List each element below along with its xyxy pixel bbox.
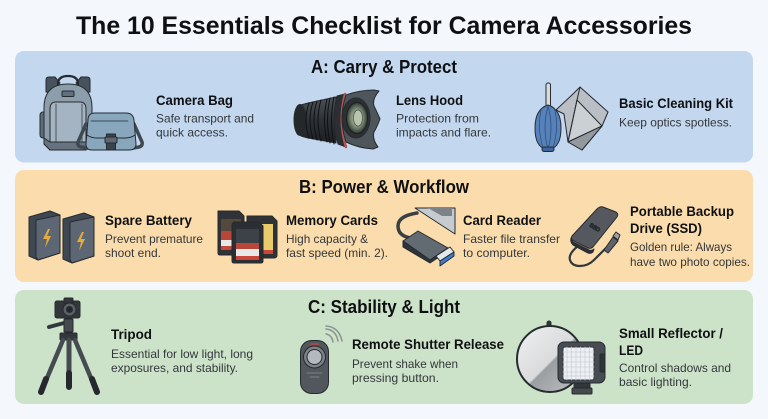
text: remote shutter release: Remote Shutter Release xyxy=(352,337,504,352)
icon: reflector and LED xyxy=(517,321,605,394)
panel: carry and protect xyxy=(15,51,753,162)
text: camera bag: Camera Bag xyxy=(156,93,233,108)
text: memory cards: Memory Cards xyxy=(286,213,378,228)
text: memory cards: fast speed (min. 2). xyxy=(286,246,388,260)
text: small reflector / LED: Control shadows and xyxy=(619,361,731,375)
icon: portable SSD xyxy=(570,207,620,266)
text: tripod xyxy=(111,327,253,375)
text: small reflector / LED xyxy=(619,326,731,389)
text: portable backup drive: have two photo copies. xyxy=(630,255,750,269)
text: spare battery: shoot end. xyxy=(105,246,161,260)
text: portable backup drive: Drive (SSD) xyxy=(630,221,702,236)
text: tripod: Tripod xyxy=(111,327,152,342)
icon: portable SSD: SSD xyxy=(588,223,601,234)
text: memory cards xyxy=(286,213,388,260)
text: cleaning kit: Basic Cleaning Kit xyxy=(619,96,733,111)
text: portable backup drive xyxy=(630,204,750,269)
text: card reader xyxy=(463,213,560,260)
text: card reader: to computer. xyxy=(463,246,530,260)
icon: card reader xyxy=(398,208,455,266)
icon: spare batteries xyxy=(29,211,94,263)
text: camera bag xyxy=(156,93,254,140)
text: spare battery: Spare Battery xyxy=(105,213,192,228)
icon: memory cards xyxy=(218,211,277,263)
text: small reflector / LED: basic lighting. xyxy=(619,375,692,389)
text: cleaning kit xyxy=(619,96,733,130)
icon: tripod with camera xyxy=(41,298,97,392)
panel: power and workflow xyxy=(15,170,753,282)
icon: lens hood xyxy=(294,90,380,149)
text: portable backup drive: Golden rule: Always xyxy=(630,240,732,254)
text: cleaning kit: Keep optics spotless. xyxy=(619,116,732,130)
icon: remote shutter xyxy=(300,326,342,394)
text: small reflector / LED: Small Reflector / xyxy=(619,326,723,341)
text: card reader: Faster file transfer xyxy=(463,232,560,246)
heading: C: C: Stability & Light xyxy=(308,297,460,317)
heading: A: A: Carry & Protect xyxy=(311,57,457,77)
text: tripod: Essential for low light, long xyxy=(111,347,253,361)
text: spare battery xyxy=(105,213,203,260)
text: remote shutter release: pressing button. xyxy=(352,371,439,385)
text: card reader: Card Reader xyxy=(463,213,542,228)
text: small reflector / LED: LED xyxy=(619,343,643,358)
panel: stability and light xyxy=(15,290,753,404)
text: tripod: exposures, and stability. xyxy=(111,361,238,375)
text: spare battery: Prevent premature xyxy=(105,232,203,246)
text: lens hood: impacts and flare. xyxy=(396,126,491,140)
text: memory cards: High capacity & xyxy=(286,232,368,246)
heading: B: B: Power & Workflow xyxy=(299,177,470,197)
text: remote shutter release: Prevent shake when xyxy=(352,357,458,371)
text: lens hood: Lens Hood xyxy=(396,93,463,108)
text: remote shutter release xyxy=(352,337,504,385)
icon: cleaning kit xyxy=(535,83,608,152)
text: camera bag: quick access. xyxy=(156,126,228,140)
text: lens hood: Protection from xyxy=(396,112,479,126)
icon: camera bag xyxy=(40,76,142,150)
text: lens hood xyxy=(396,93,491,140)
text: portable backup drive: Portable Backup xyxy=(630,204,734,219)
title: The 10 Essentials Checklist for Camera Accessories xyxy=(76,12,692,40)
text: camera bag: Safe transport and xyxy=(156,112,254,126)
